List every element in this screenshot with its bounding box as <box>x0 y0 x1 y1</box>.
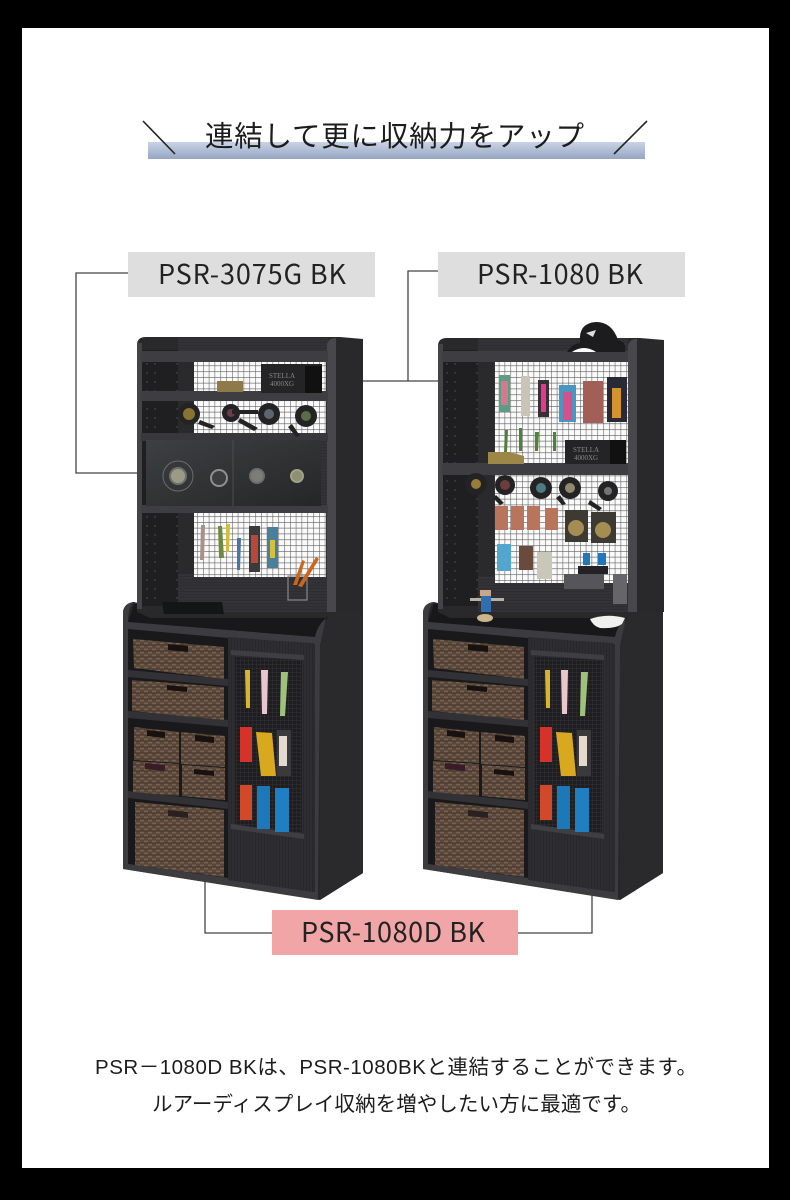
cap <box>567 322 625 352</box>
right cabinet: hutch PSR-1080 <box>438 322 664 618</box>
shelves <box>141 351 328 362</box>
connector lines <box>76 271 592 933</box>
label: PSR-3075G BK <box>128 252 375 297</box>
label: PSR-1080D BK: PSR-1080D BK <box>301 911 486 950</box>
pen holder <box>288 557 319 600</box>
wire grid panels <box>495 362 628 583</box>
glass reel cabinet <box>146 440 321 506</box>
right slash <box>614 121 647 154</box>
wire basket and tools <box>564 566 627 604</box>
shelves <box>442 351 628 362</box>
hook and line packs <box>495 506 616 579</box>
side edge <box>327 338 336 612</box>
title band <box>148 142 645 159</box>
left slash <box>143 121 175 154</box>
line 1: PSR－1080D BKは、PSR-1080BKと連結することができます。 <box>95 1056 697 1079</box>
figurine <box>470 590 504 622</box>
spinning reels <box>465 473 618 511</box>
label: PSR-3075G BK: PSR-3075G BK <box>158 253 347 292</box>
description text <box>95 1056 697 1116</box>
spinning reels <box>178 403 317 437</box>
side edge <box>628 339 637 612</box>
title <box>143 121 647 159</box>
boxed reel and product box <box>217 364 322 393</box>
line 2: ルアーディスプレイ収納を増やしたい方に最適です。 <box>152 1093 641 1116</box>
boxed reel and product box: 4000XG <box>270 380 294 388</box>
label: PSR-1080 BK <box>438 252 685 297</box>
packaged lures <box>499 375 627 452</box>
tackle box <box>162 602 224 614</box>
wire grid panels <box>194 362 326 577</box>
label: PSR-1080D BK <box>272 910 518 955</box>
boxed reel and product box: STELLA <box>573 446 599 454</box>
left cabinet: hutch PSR-3075G <box>137 337 363 618</box>
boxed reel and product box <box>488 440 626 464</box>
label: PSR-1080 BK: PSR-1080 BK <box>477 253 644 292</box>
bowl <box>590 616 625 628</box>
title text: 連結して更に収納力をアップ <box>205 121 584 153</box>
boxed reel and product box: STELLA <box>269 372 295 380</box>
boxed reel and product box: 4000XG <box>574 454 598 462</box>
left cabinet: lower unit <box>123 602 363 900</box>
right cabinet: lower unit <box>423 602 663 900</box>
lures on grid <box>200 524 278 572</box>
